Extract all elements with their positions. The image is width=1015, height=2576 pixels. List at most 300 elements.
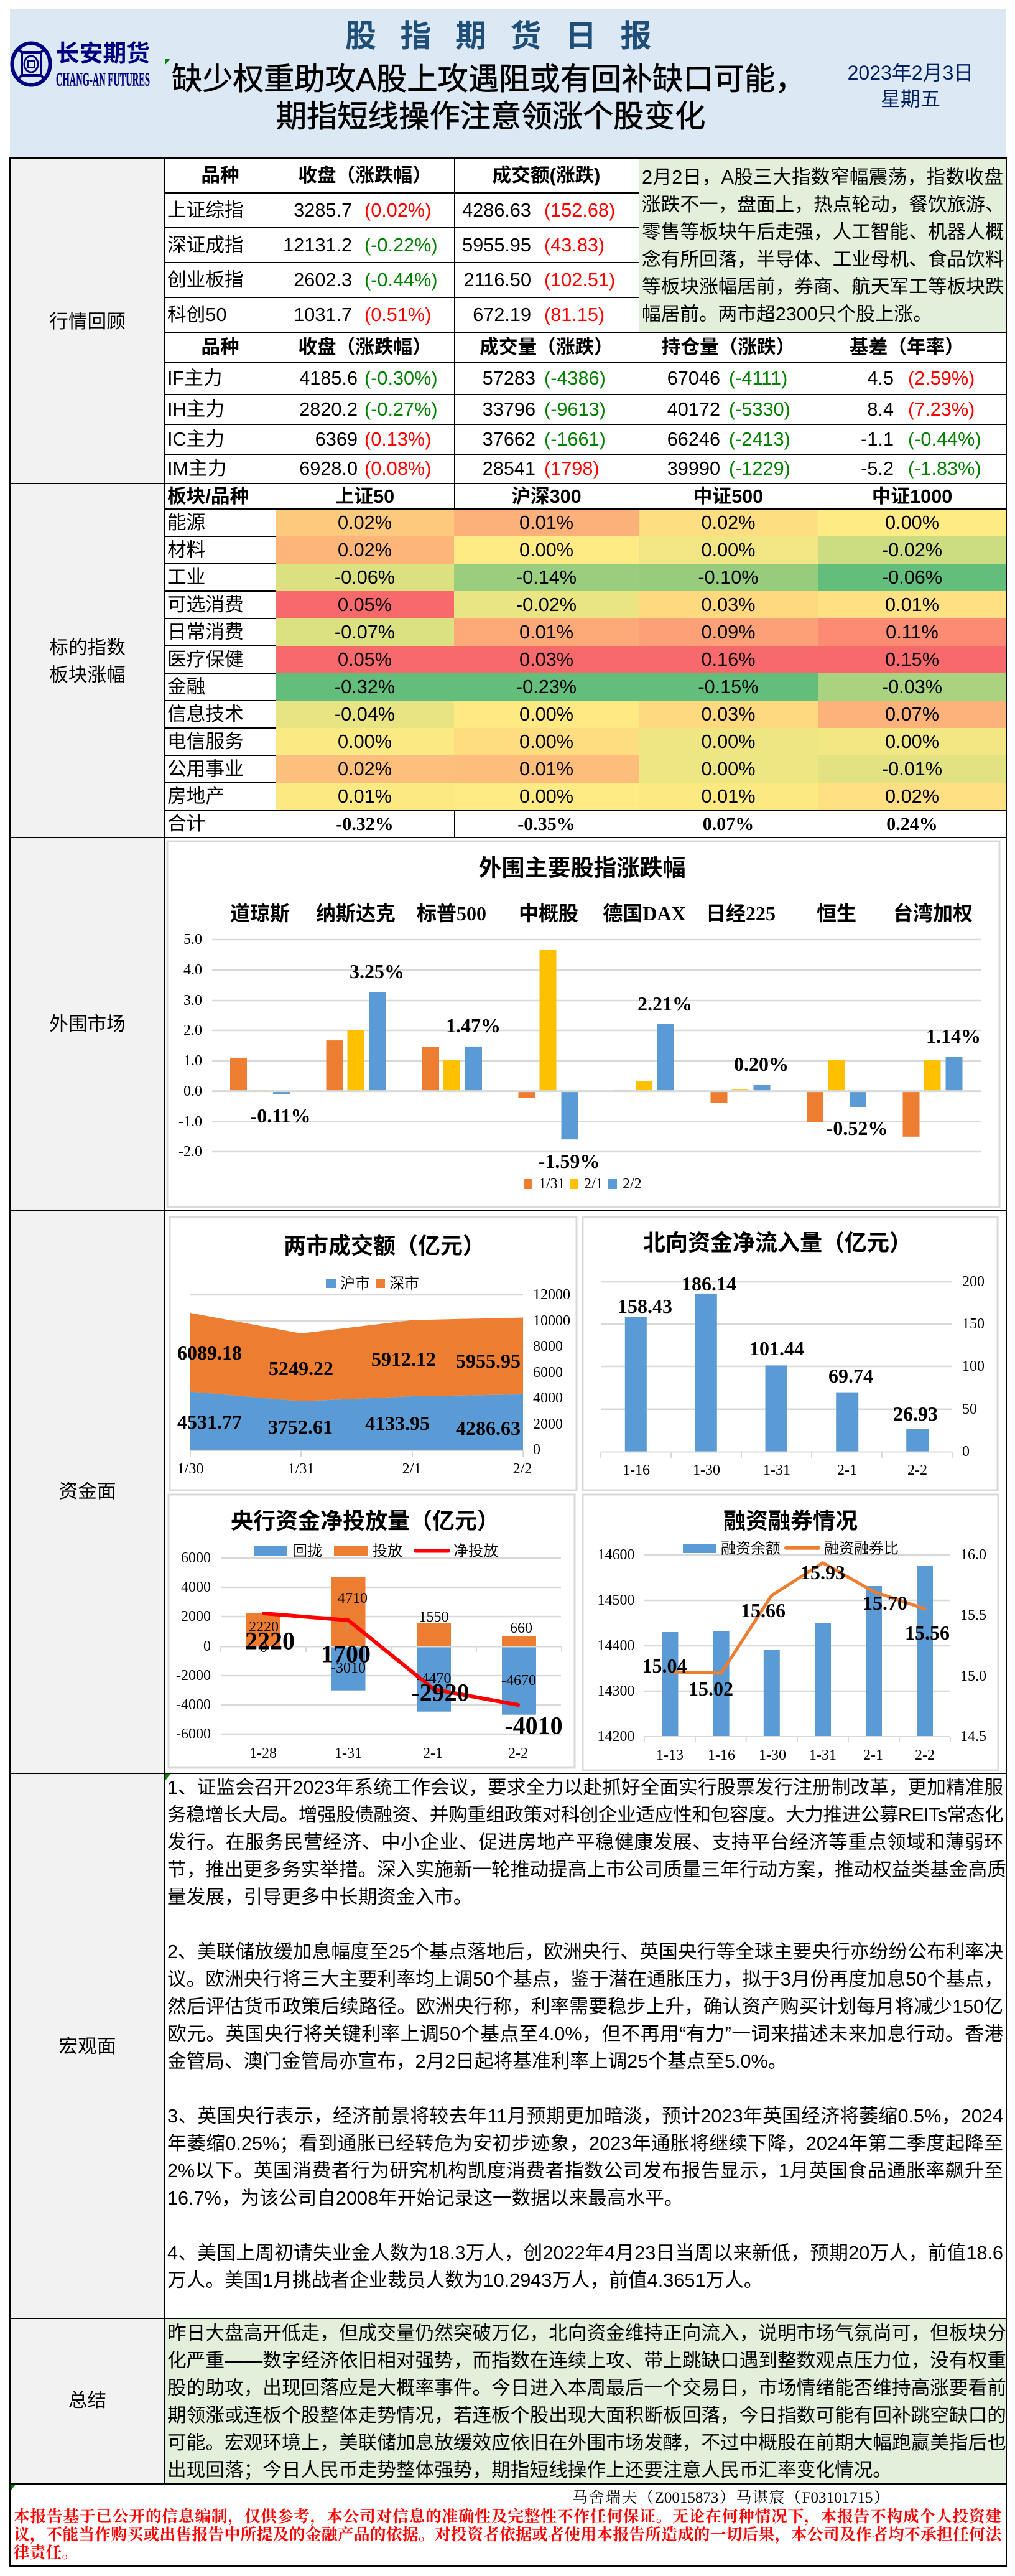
table row: 创业板指 — [167, 269, 615, 291]
data labels: 3.25% — [350, 960, 404, 982]
y axis and grid: -1.0 — [178, 1114, 202, 1130]
axes: 2-2 — [915, 1747, 935, 1763]
heatmap row: 信息技术: 0.00% — [519, 704, 573, 725]
data labels: 15.70 — [863, 1592, 907, 1614]
category labels: 恒生 — [817, 902, 856, 925]
text block: macro news — [167, 1774, 1003, 2294]
table row: IH主力: 8.4 — [867, 399, 894, 420]
legend: 融资余额 — [721, 1541, 781, 1557]
text block: macro news: 16.7%，为该公司自2008年开始记录这一数据以来最高水平。 — [167, 2188, 684, 2209]
commentary text: 涨跌不一，盘面上，热点轮动，餐饮旅游、 — [642, 194, 1004, 215]
heatmap row: 能源: 0.01% — [519, 512, 573, 533]
table row: 深证成指: (43.83) — [544, 235, 605, 256]
text block: macro news: 万人。美国1月挑战者企业裁员人数为10.2943万人，前值4.3651万人。 — [167, 2270, 762, 2291]
chart: overseas index changes — [165, 839, 1001, 1209]
table row: 上证综指: (0.02%) — [364, 200, 431, 221]
table row: 科创50 — [167, 304, 605, 325]
heatmap row: 能源 — [167, 510, 1006, 536]
data labels: 6089.18 — [177, 1342, 242, 1364]
x axis labels: 2-2 — [508, 1745, 528, 1762]
table row: IC主力 — [167, 429, 981, 450]
section label: capital: 资金面 — [58, 1481, 116, 1502]
heatmap total row: 0.24% — [886, 814, 938, 834]
heatmap row: 日常消费: 日常消费 — [167, 622, 244, 643]
author line: 马舍瑞夫（Z0015873）马谌宸（F03101715） — [572, 2490, 889, 2506]
section label: sector gains: 标的指数 — [49, 637, 126, 658]
data labels: -0.11% — [251, 1104, 310, 1127]
heatmap row: 医疗保健: 0.16% — [702, 649, 755, 670]
data labels: 5249.22 — [269, 1357, 333, 1379]
heatmap row: 公用事业: 0.02% — [338, 758, 392, 780]
table row: IC主力: -1.1 — [861, 429, 894, 450]
axes: 1-31 — [809, 1747, 837, 1763]
commentary text: 念有所回落，半导体、工业母机、食品饮料 — [642, 249, 1004, 270]
heatmap row: 房地产: 0.01% — [702, 786, 755, 807]
data labels: 26.93 — [893, 1402, 938, 1425]
heatmap row: 金融: 金融 — [167, 676, 205, 698]
text block: macro news: 发行。在服务民营经济、中小企业、促进房地产平稳健康发展、支持平台经济等重点领域和薄弱环 — [167, 1832, 1003, 1853]
series 2/1 bars — [251, 950, 940, 1091]
icon: Chang-An Futures logo — [10, 41, 150, 90]
heatmap row: 日常消费: -0.07% — [335, 622, 395, 643]
heatmap total row: -0.32% — [336, 814, 394, 834]
heatmap row: 工业: -0.06% — [882, 567, 942, 588]
legend — [683, 1541, 899, 1557]
bars — [625, 1294, 929, 1452]
category labels: 台湾加权 — [893, 902, 973, 925]
heatmap row: 信息技术: -0.04% — [335, 704, 395, 725]
table row: IH主力: 33796 — [483, 399, 535, 420]
axes: 14500 — [597, 1592, 634, 1608]
line: net injection — [264, 1613, 518, 1705]
table: index review header — [201, 165, 600, 186]
axes: 50 — [962, 1401, 977, 1417]
axes: 2-2 — [907, 1462, 927, 1478]
heatmap row: 电信服务: 0.00% — [519, 731, 573, 752]
category labels: 中概股 — [519, 902, 578, 925]
y axis and grid: 1.0 — [183, 1053, 202, 1069]
x axis labels: 1-31 — [335, 1745, 362, 1762]
table row: IH主力: 40172 — [667, 399, 720, 420]
heatmap row: 可选消费 — [167, 591, 1006, 618]
data labels: 5912.12 — [371, 1348, 436, 1370]
text block: macro news: 金管局、澳门金管局亦宣布，2月2日起将基准利率上调25个基点至5.0%。 — [167, 2051, 787, 2072]
table row: 深证成指: (-0.22%) — [364, 235, 438, 256]
axes: 1/31 — [288, 1461, 314, 1477]
heatmap row: 电信服务: 0.00% — [702, 731, 755, 752]
heatmap row: 金融: -0.23% — [516, 676, 577, 698]
table row: IM主力: 39990 — [667, 458, 720, 479]
heatmap row: 日常消费: 0.01% — [519, 622, 573, 643]
data labels: 15.56 — [905, 1622, 950, 1644]
summary text: 化严重——数字经济依旧相对强势，而指数在连续上攻、带上跳缺口遇到整数观点压力位，没有权重 — [167, 2350, 1006, 2371]
legend — [254, 1543, 498, 1559]
heatmap row: 公用事业 — [167, 755, 1006, 783]
table row: IC主力: (-1661) — [544, 429, 606, 450]
heatmap row: 能源: 0.02% — [338, 512, 392, 533]
table: futures header: 持仓量（涨跌） — [662, 337, 795, 358]
text block: macro news: 节，推出更多务实举措。深入实施新一轮推动提高上市公司质量三年行动方案，推动权益类基金高质 — [167, 1859, 1006, 1880]
data labels: 15.02 — [688, 1678, 733, 1700]
data labels — [618, 1272, 938, 1425]
summary text: 出现回落；今日人民币走势整体强势，期指短线操作上还要注意人民币汇率变化情况。 — [167, 2460, 892, 2481]
heatmap row: 工业 — [167, 564, 1006, 591]
table row: IM主力: 6928.0 — [299, 458, 358, 479]
data labels: 0.20% — [734, 1053, 789, 1075]
table row: IF主力: 4.5 — [867, 368, 894, 389]
heatmap row: 工业: 工业 — [167, 567, 205, 588]
heatmap row: 金融 — [167, 673, 1006, 701]
table row: IM主力: (-1229) — [729, 458, 790, 479]
heatmap row: 能源: 能源 — [167, 512, 205, 533]
data labels: -1.59% — [539, 1150, 600, 1172]
y axis and grid — [178, 931, 981, 1160]
heatmap row: 公用事业: 0.00% — [702, 758, 755, 780]
y axis and grid: 0.0 — [183, 1083, 202, 1099]
headline: 期指短线操作注意领涨个股变化 — [276, 100, 705, 134]
table row: IC主力: (-0.44%) — [908, 429, 981, 450]
net injection labels: -4010 — [504, 1711, 563, 1740]
table row: IF主力: (-4386) — [544, 368, 606, 389]
table row: IF主力: 57283 — [483, 368, 535, 389]
table row: IC主力: (0.13%) — [364, 429, 431, 450]
table row: IC主力: (-2413) — [729, 429, 790, 450]
small labels: 4710 — [338, 1590, 368, 1607]
axes: 1-30 — [759, 1747, 786, 1763]
legend — [326, 1276, 419, 1292]
table row: 深证成指: 12131.2 — [283, 235, 352, 256]
table row: 科创50: (81.15) — [544, 304, 605, 325]
table row: IH主力: (-5330) — [729, 399, 790, 420]
legend: 深市 — [389, 1276, 419, 1292]
category labels: 标普500 — [417, 902, 486, 925]
table row: IM主力: (-1.83%) — [908, 458, 981, 479]
heatmap row: 工业: -0.06% — [335, 567, 395, 588]
report title: 股指期货日报 — [345, 19, 675, 54]
bars: 回拢 — [331, 1646, 536, 1715]
axes: 0 — [533, 1442, 540, 1458]
heatmap total row: -0.35% — [517, 814, 575, 834]
panel: report header band — [10, 9, 1006, 157]
table row: 科创50: 科创50 — [167, 304, 226, 325]
axes: 2/1 — [402, 1461, 421, 1477]
y axis labels — [176, 1550, 211, 1742]
legend — [524, 1176, 642, 1192]
axes: 100 — [962, 1358, 985, 1374]
table: futures header: 收盘（涨跌幅） — [298, 337, 432, 358]
text block: macro news: 然后评估货币政策后续路径。欧洲央行称，利率需要稳步上升，确认资产购买计划每月将减少150亿 — [167, 1996, 1003, 2017]
heatmap total row: 合计 — [167, 813, 205, 834]
heatmap row: 日常消费: 0.09% — [702, 622, 755, 643]
table row: 深证成指 — [167, 235, 605, 256]
table row: 上证综指: (152.68) — [544, 200, 615, 221]
heatmap row: 可选消费: 0.05% — [338, 594, 392, 615]
text block: macro news: 务稳增长大局。增强股债融资、并购重组政策对科创企业适应性和包容度。大力推进公募REITs常态化 — [167, 1804, 1003, 1826]
heatmap header: 中证1000 — [872, 486, 952, 507]
table row: 创业板指: (-0.44%) — [364, 269, 438, 291]
table row: IM主力: IM主力 — [167, 458, 226, 479]
small labels: 2220 — [249, 1619, 279, 1635]
table row: IF主力: (-4111) — [729, 368, 787, 389]
table row: IF主力: 4185.6 — [299, 368, 358, 389]
axes — [177, 1287, 570, 1477]
commentary text — [642, 167, 1004, 325]
summary text: 股的助攻，出现回落应是大概率事件。今日进入本周最后一个交易日，市场情绪能否维持高涨要看前 — [167, 2378, 1006, 2399]
heatmap row: 材料: 0.00% — [519, 539, 573, 561]
table row: 上证综指: 上证综指 — [167, 200, 244, 221]
heatmap row: 信息技术 — [167, 701, 1006, 728]
table row: IF主力 — [167, 368, 975, 389]
series 1/31 bars — [230, 1040, 919, 1137]
icon: Chang-An Futures logo: 长安期货 — [56, 41, 150, 67]
data labels: 4133.95 — [365, 1412, 430, 1434]
heatmap row: 日常消费 — [167, 618, 1006, 646]
y axis and grid: 2.0 — [183, 1022, 202, 1038]
section label: overseas markets: 外围市场 — [49, 1014, 126, 1035]
table row: IF主力: 67046 — [667, 368, 720, 389]
heatmap row: 医疗保健 — [167, 646, 1006, 673]
report date — [848, 62, 973, 110]
heatmap row: 日常消费: 0.11% — [886, 622, 939, 643]
heatmap row: 房地产: 房地产 — [167, 786, 225, 807]
section label: sector gains — [49, 637, 126, 686]
heatmap row: 材料 — [167, 536, 1006, 564]
x axis labels: 2-1 — [423, 1745, 443, 1762]
legend: 回拢 — [292, 1543, 322, 1559]
small labels: 1550 — [419, 1609, 449, 1625]
heatmap header: 上证50 — [335, 486, 394, 507]
chart: two-market turnover — [168, 1215, 578, 1492]
heatmap row: 电信服务: 电信服务 — [167, 731, 244, 752]
legend: 1/31 — [539, 1176, 565, 1192]
summary text: 昨日大盘高开低走，但成交量仍然突破万亿，北向资金维持正向流入，说明市场气氛尚可，但板块分 — [167, 2323, 1006, 2344]
summary text — [167, 2320, 1003, 2484]
heatmap header: 沪深300 — [511, 486, 582, 507]
table: futures header — [201, 337, 964, 358]
axes: 200 — [962, 1274, 985, 1290]
heatmap row: 金融: -0.15% — [698, 676, 759, 698]
heatmap row: 能源: 0.02% — [702, 512, 755, 533]
y axis and grid: 3.0 — [183, 992, 202, 1009]
heatmap row: 能源: 0.00% — [885, 512, 939, 533]
data labels: 15.93 — [800, 1561, 845, 1584]
disclaimer: 本报告基于已公开的信息编制，仅供参考，本公司对信息的准确性及完整性不作任何保证。无论在何种情况下，本报告不构成个人投资建 — [14, 2508, 1001, 2526]
commentary text: 等板块涨幅居前，券商、航天军工等板块跌 — [642, 276, 1004, 297]
heatmap row: 房地产 — [167, 783, 1006, 810]
bars: 投放 — [246, 1577, 536, 1646]
axes: 1-16 — [623, 1462, 650, 1478]
axes: 8000 — [533, 1338, 563, 1355]
headline: 缺少权重助攻A股上攻遇阻或有回补缺口可能， — [172, 62, 805, 96]
axes: 2/2 — [513, 1461, 532, 1477]
table row: IH主力: (-9613) — [544, 399, 606, 420]
table row: IC主力: 37662 — [483, 429, 535, 450]
axes: 1-30 — [693, 1462, 720, 1478]
small labels: 660 — [510, 1620, 532, 1636]
table row: 上证综指: 3285.7 — [294, 200, 352, 221]
x axis labels: 1-28 — [249, 1745, 277, 1762]
axes: 14600 — [597, 1547, 634, 1563]
heatmap row: 公用事业: 0.01% — [519, 758, 573, 780]
axes: 1-31 — [763, 1462, 790, 1478]
table row: 深证成指: 5955.95 — [462, 235, 531, 256]
axes: 0 — [962, 1444, 970, 1460]
table: futures header: 品种 — [201, 337, 239, 358]
net injection labels: -2920 — [411, 1679, 470, 1706]
chart: margin financing: 融资融券情况 — [723, 1508, 858, 1533]
axes: 1-16 — [708, 1747, 735, 1763]
axes: 16.0 — [960, 1547, 986, 1563]
legend: 净投放 — [453, 1543, 498, 1559]
table row: 深证成指: 深证成指 — [167, 235, 244, 256]
heatmap row: 材料: 材料 — [167, 539, 205, 561]
heatmap row: 电信服务: 0.00% — [338, 731, 392, 752]
category labels: 日经225 — [706, 902, 776, 925]
text block: macro news: 2、美联储放缓加息幅度至25个基点落地后，欧洲央行、英国央行等全球主要央行亦纷纷公布利率决 — [167, 1941, 1003, 1962]
text block: macro news: 议。欧洲央行将三大主要利率均上调50个基点，鉴于潜在通胀压力，拟于3月份再度加息50个基点， — [167, 1969, 1003, 1990]
y axis and grid: 5.0 — [183, 931, 202, 948]
panel: summary — [165, 2318, 1006, 2484]
axes: 10000 — [533, 1313, 570, 1329]
chart: central bank net injection — [167, 1493, 577, 1770]
axes: 14.5 — [960, 1729, 986, 1745]
commentary text: 幅居前。两市超2300只个股上涨。 — [642, 304, 932, 325]
chart: margin financing — [581, 1493, 1000, 1772]
heatmap row: 房地产: 0.02% — [885, 786, 939, 807]
heatmap row: 医疗保健: 0.15% — [885, 649, 939, 670]
axes: 2000 — [533, 1416, 563, 1432]
axes: 15.5 — [960, 1607, 986, 1623]
axes: 1-13 — [656, 1747, 684, 1763]
table row: 创业板指: 创业板指 — [167, 269, 244, 291]
summary text: 期领涨或连板个股整体走势情况，若连板个股出现大面积断板回落，今日指数可能有回补跳空缺口的 — [167, 2405, 1006, 2426]
heatmap row: 医疗保健: 医疗保健 — [167, 649, 244, 670]
table row: IM主力: (1798) — [544, 458, 600, 479]
table row: 创业板指: (102.51) — [544, 269, 615, 291]
section label: sector gains: 板块涨幅 — [49, 665, 126, 686]
data labels: 101.44 — [749, 1337, 804, 1360]
table row: IF主力: (2.59%) — [908, 368, 975, 389]
section label: market review: 行情回顾 — [49, 311, 126, 332]
heatmap row: 公用事业: 公用事业 — [167, 758, 244, 780]
small labels: -4670 — [501, 1673, 536, 1689]
data labels: 5955.95 — [456, 1350, 521, 1372]
data labels: 3752.61 — [268, 1416, 333, 1438]
legend: 2/1 — [584, 1176, 603, 1192]
data labels: 69.74 — [828, 1365, 873, 1387]
table row: 创业板指: 2602.3 — [294, 269, 352, 291]
net injection labels: 2220 — [245, 1626, 295, 1655]
chart: two-market turnover: 两市成交额（亿元） — [284, 1233, 485, 1258]
table row: IH主力 — [167, 399, 975, 420]
data labels — [642, 1561, 950, 1700]
disclaimer: 议，不能当作购买或出售报告中所提及的金融产品的依据。对投资者依据或者使用本报告所造成的一切后果，本公司及作者均不承担任何法 — [14, 2526, 1001, 2544]
axes — [601, 1274, 985, 1478]
text block: macro news: 1、证监会召开2023年系统工作会议，要求全力以赴抓好全面实行股票发行注册制改革，更加精准服 — [167, 1777, 1003, 1798]
heatmap row: 金融: -0.32% — [335, 676, 395, 698]
axes: 14400 — [597, 1638, 634, 1654]
text block: macro news: 2%以下。英国消费者行为研究机构凯度消费者指数公司发布报告显示，1月英国食品通胀率飙升至 — [167, 2160, 1003, 2182]
legend: 投放 — [373, 1543, 402, 1559]
heatmap header — [167, 486, 952, 507]
table row: IM主力: -5.2 — [861, 458, 894, 479]
table row: IM主力 — [167, 458, 981, 479]
heatmap row: 可选消费: -0.02% — [516, 594, 577, 615]
category labels — [230, 902, 973, 925]
category labels: 德国DAX — [603, 902, 686, 925]
panel: left label column background — [10, 158, 165, 2484]
y axis labels: -2000 — [176, 1668, 211, 1684]
heatmap row: 可选消费: 可选消费 — [167, 594, 244, 615]
axes: 15.0 — [960, 1668, 986, 1684]
chart: northbound net inflow — [581, 1215, 999, 1492]
data labels: 15.04 — [642, 1654, 687, 1677]
table row: IH主力: IH主力 — [167, 399, 225, 420]
y axis labels: 0 — [203, 1638, 211, 1654]
legend: 沪市 — [340, 1276, 370, 1292]
net injection labels — [245, 1626, 563, 1740]
heatmap total row — [167, 813, 938, 834]
heatmap row: 信息技术: 0.07% — [885, 704, 939, 725]
series 2/2 bars — [273, 992, 963, 1139]
small labels: -3010 — [331, 1660, 366, 1676]
chart: overseas index changes: 外围主要股指涨跌幅 — [479, 855, 685, 881]
table row: IF主力: (-0.30%) — [364, 368, 438, 389]
text block: macro news: 3、英国央行表示，经济前景将较去年11月预期更加暗淡，预计2023年英国经济将萎缩0.5%，2024 — [167, 2106, 1003, 2127]
panel: market commentary — [639, 158, 1006, 332]
small labels — [249, 1590, 536, 1689]
net injection labels: 1700 — [321, 1640, 371, 1668]
data labels: 15.66 — [741, 1599, 786, 1622]
data labels — [177, 1342, 521, 1439]
table row: IC主力: 6369 — [315, 429, 358, 450]
table row: 创业板指: 2116.50 — [463, 269, 531, 291]
heatmap row: 房地产: 0.01% — [338, 786, 392, 807]
table row: IH主力: (-0.27%) — [364, 399, 438, 420]
table: index review header: 收盘（涨跌幅） — [298, 165, 432, 186]
heatmap row: 可选消费: 0.01% — [885, 594, 939, 615]
axes: 150 — [962, 1316, 985, 1332]
table: index review header: 成交额(涨跌) — [493, 165, 600, 186]
data labels: -0.52% — [827, 1117, 888, 1139]
heatmap row: 材料: 0.00% — [702, 539, 755, 561]
y axis labels: -6000 — [176, 1726, 211, 1742]
bars: 融资余额 — [662, 1566, 933, 1736]
text block: macro news: 4、美国上周初请失业金人数为18.3万人，创2022年4月23日当周以来新低，预期20万人，前值18.6 — [167, 2242, 1003, 2264]
heatmap total row: 0.07% — [703, 814, 754, 834]
legend: 融资融券比 — [824, 1541, 899, 1557]
y axis labels: 2000 — [181, 1608, 211, 1625]
heatmap header: 中证500 — [693, 486, 763, 507]
axes: 12000 — [533, 1287, 570, 1303]
data labels: 1.14% — [926, 1025, 981, 1047]
table row: IC主力: IC主力 — [167, 429, 225, 450]
data labels — [251, 960, 981, 1172]
headline — [172, 62, 805, 134]
line: 融资融券比 — [670, 1563, 925, 1673]
heatmap row: 材料: -0.02% — [882, 539, 942, 561]
section label: macro: 宏观面 — [58, 2036, 116, 2057]
table: futures header: 基差（年率） — [850, 337, 964, 358]
text block: macro news: 量发展，引导更多中长期资金入市。 — [167, 1887, 473, 1908]
category labels: 纳斯达克 — [316, 902, 396, 925]
heatmap row: 可选消费: 0.03% — [702, 594, 755, 615]
axes: 1/30 — [177, 1461, 203, 1477]
axes: 4000 — [533, 1390, 563, 1406]
axes — [597, 1547, 986, 1763]
heatmap row: 信息技术: 信息技术 — [167, 704, 244, 725]
commentary text: 2月2日，A股三大指数窄幅震荡，指数收盘 — [642, 167, 1003, 188]
